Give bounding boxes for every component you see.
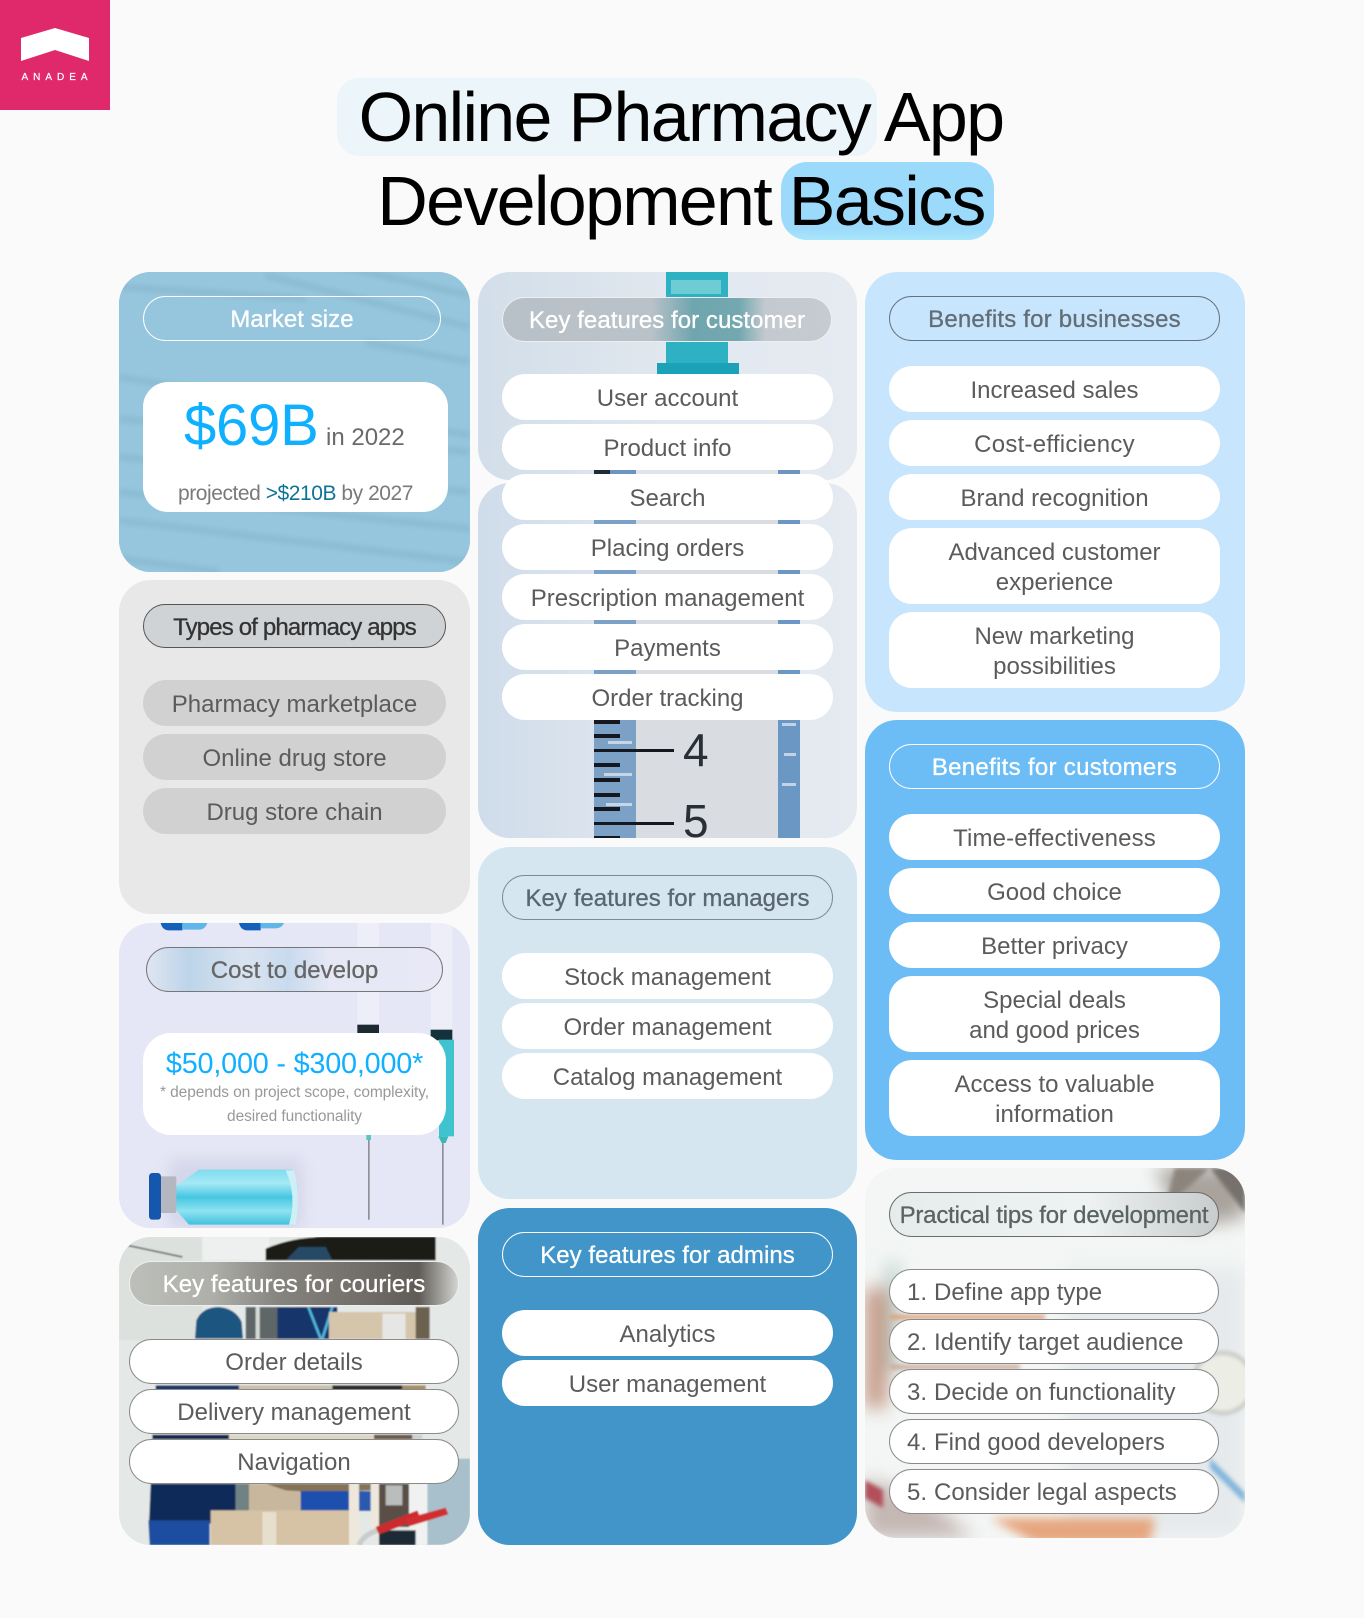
- footnote: * depends on project scope, complexity,: [160, 1084, 429, 1101]
- image: blue diagonal stripes: [119, 272, 470, 572]
- heading: customers: Benefits for customers: [932, 754, 1177, 781]
- tip 3: [889, 1369, 1219, 1414]
- item: [502, 674, 833, 720]
- heading: couriers: Key features for couriers: [163, 1271, 425, 1298]
- item: [502, 524, 833, 570]
- item: Order management: [563, 1014, 772, 1040]
- stat label: in 2022: [326, 424, 405, 451]
- item: [889, 474, 1220, 520]
- title: [359, 78, 1003, 240]
- heading: market size: Market size: [230, 306, 354, 333]
- panel: benefits for customers: [865, 720, 1245, 1160]
- item: [889, 366, 1220, 412]
- heading: managers: [502, 875, 833, 920]
- stat card: [143, 382, 448, 512]
- heading: admins: [502, 1232, 833, 1277]
- panel: cost to develop: [119, 923, 470, 1228]
- panel: benefits for businesses: [865, 272, 1245, 712]
- item: [889, 528, 1220, 604]
- heading: tips: Practical tips for development: [900, 1202, 1208, 1229]
- panel: key features for managers: [478, 847, 857, 1199]
- image: syringes and vial: [149, 923, 454, 1228]
- item: Prescription management: [531, 584, 804, 612]
- item: [502, 1053, 833, 1099]
- item: experience: [996, 568, 1113, 596]
- item: Special deals: [983, 986, 1126, 1014]
- item: [502, 1310, 833, 1356]
- item: Product info: [603, 434, 732, 462]
- item: Payments: [614, 634, 721, 662]
- tip 3: Decide on functionality: [934, 1379, 1175, 1406]
- heading: couriers: [129, 1261, 459, 1306]
- tip 2: 2.: [907, 1329, 927, 1356]
- item: [143, 734, 446, 780]
- item: Better privacy: [981, 932, 1128, 960]
- item: User management: [569, 1370, 766, 1398]
- title highlight: pharmacy: [337, 78, 877, 156]
- image: doctor in white coat, blurred: [865, 1168, 1245, 1538]
- stat: $69B in 2022: $69B: [184, 393, 319, 458]
- cost card: [143, 1033, 446, 1135]
- image: syringe scale, lower: 4: [683, 724, 709, 776]
- item: Brand recognition: [960, 484, 1149, 512]
- item: New marketing: [974, 622, 1135, 650]
- title highlight: basics: [781, 162, 994, 240]
- projection: projected >$210B by 2027: [178, 482, 413, 505]
- item: Cost-efficiency: [974, 430, 1135, 458]
- cost range: $50,000 - $300,000*: [166, 1048, 423, 1080]
- item: [502, 374, 833, 420]
- panel: key features for customer: [478, 272, 857, 838]
- heading: admins: Key features for admins: [540, 1242, 795, 1269]
- tip 2: [889, 1319, 1219, 1364]
- footnote: desired functionality: [227, 1108, 362, 1125]
- heading: customer features: [502, 297, 832, 342]
- item: [889, 420, 1220, 466]
- heading: businesses: [889, 296, 1220, 341]
- heading: types: [143, 604, 446, 648]
- heading: cost: Cost to develop: [211, 957, 378, 984]
- item: Analytics: [619, 1320, 716, 1348]
- item: [502, 574, 833, 620]
- tip 4: [889, 1419, 1219, 1464]
- item: [889, 922, 1220, 968]
- item: Order details: [225, 1349, 363, 1376]
- tip 5: [889, 1469, 1219, 1514]
- tip 1: [889, 1269, 1219, 1314]
- item: [502, 953, 833, 999]
- tip 1: 1.: [907, 1279, 927, 1306]
- item: information: [995, 1100, 1114, 1128]
- item: Delivery management: [177, 1399, 411, 1426]
- item: Order tracking: [591, 684, 744, 712]
- item: Good choice: [987, 878, 1122, 906]
- panel: key features for admins: [478, 1208, 857, 1545]
- panel: market size: [119, 272, 470, 572]
- item: Increased sales: [970, 376, 1139, 404]
- item: and good prices: [969, 1016, 1140, 1044]
- item: Catalog management: [553, 1064, 782, 1090]
- heading: types: Types of pharmacy apps: [173, 614, 416, 640]
- tip 4: 4.: [907, 1429, 927, 1456]
- item: Search: [629, 484, 706, 512]
- panel: practical tips for development: [865, 1168, 1245, 1538]
- item: Stock management: [564, 964, 771, 990]
- item: [502, 1003, 833, 1049]
- item: Navigation: [237, 1449, 351, 1476]
- item: [502, 1360, 833, 1406]
- tip 2: Identify target audience: [934, 1329, 1184, 1356]
- item: [889, 976, 1220, 1052]
- heading: businesses: Benefits for businesses: [928, 306, 1181, 333]
- heading: tips: [889, 1192, 1219, 1237]
- item: Online drug store: [202, 744, 387, 772]
- item: User account: [597, 384, 738, 412]
- item: Pharmacy marketplace: [172, 690, 417, 718]
- tip 5: Consider legal aspects: [934, 1479, 1177, 1506]
- item: [129, 1439, 459, 1484]
- item: Access to valuable: [954, 1070, 1155, 1098]
- tip 4: Find good developers: [934, 1429, 1165, 1456]
- item: Placing orders: [591, 534, 744, 562]
- item: [502, 624, 833, 670]
- image: syringe scale, upper: [478, 272, 857, 480]
- heading: customer features: Key features for customer: [529, 307, 805, 334]
- icon: logo chevron: [21, 28, 89, 61]
- tip 3: 3.: [907, 1379, 927, 1406]
- image: syringe scale, lower: [478, 483, 857, 838]
- item: [143, 680, 446, 726]
- item: [129, 1389, 459, 1434]
- item: [889, 1060, 1220, 1136]
- panel: types of pharmacy apps: [119, 580, 470, 914]
- item: [889, 868, 1220, 914]
- tip 5: 5.: [907, 1479, 927, 1506]
- item: possibilities: [993, 652, 1116, 680]
- item: [502, 474, 833, 520]
- heading: cost: [146, 947, 443, 992]
- footnote: [160, 1084, 429, 1125]
- logo wordmark: ANADEA: [21, 72, 93, 83]
- item: [129, 1339, 459, 1384]
- item: [889, 612, 1220, 688]
- title: Development Basics: [377, 162, 985, 240]
- panel: key features for couriers: [119, 1237, 470, 1545]
- image: courier with boxes: [120, 1237, 470, 1545]
- item: Drug store chain: [206, 798, 383, 826]
- heading: market size: [143, 296, 441, 341]
- tip 1: Define app type: [934, 1279, 1102, 1306]
- title: Online Pharmacy App: [359, 78, 1003, 156]
- item: Advanced customer: [948, 538, 1161, 566]
- logo: Anadea: [0, 0, 110, 110]
- heading: managers: Key features for managers: [525, 885, 810, 912]
- item: [889, 814, 1220, 860]
- item: [143, 788, 446, 834]
- heading: customers: [889, 744, 1220, 789]
- item: Time-effectiveness: [953, 824, 1156, 852]
- item: [502, 424, 833, 470]
